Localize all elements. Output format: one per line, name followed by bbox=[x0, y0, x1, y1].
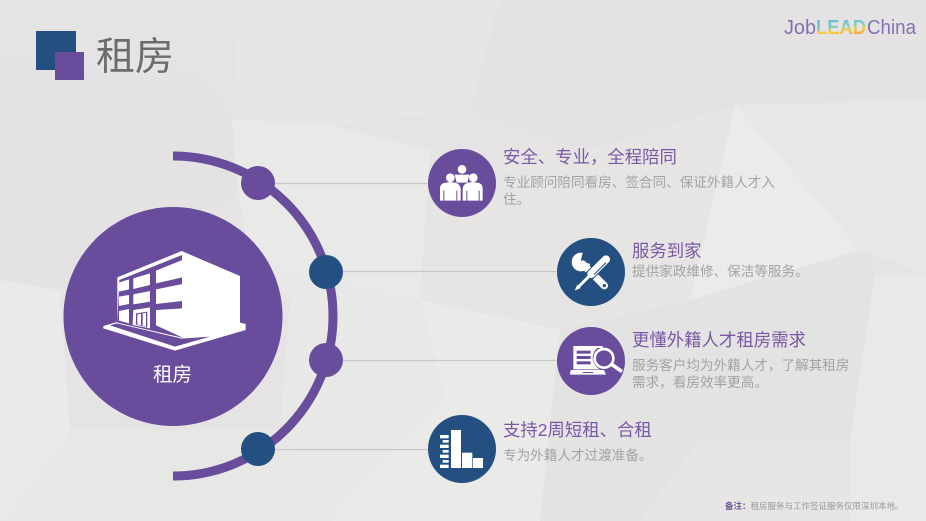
icon badge: people bbox=[428, 149, 496, 217]
arc bbox=[173, 156, 333, 476]
connector lines bbox=[258, 184, 560, 450]
item 4 text: 专为外籍人才过渡准备。 bbox=[503, 448, 653, 463]
item 3 text: 更懂外籍人才租房需求 bbox=[632, 330, 806, 350]
item 1 text: 安全、专业，全程陪同 bbox=[503, 147, 677, 167]
logo: JobLEADChina: LEAD bbox=[816, 17, 866, 39]
footnote: 备注：租房服务与工作签证服务仅限深圳本地。 bbox=[725, 501, 904, 511]
item 2 text: 服务到家 bbox=[632, 241, 702, 261]
item 3 text: 服务客户均为外籍人才，了解其租房需求，看房效率更高。 bbox=[632, 358, 850, 390]
arc node 3 bbox=[309, 343, 343, 377]
item 3 text bbox=[632, 330, 850, 390]
logo: JobLEADChina bbox=[784, 17, 917, 39]
arc node 4 bbox=[241, 432, 275, 466]
main circle label: 租房 bbox=[153, 364, 192, 386]
logo: JobLEADChina: China bbox=[867, 17, 917, 39]
item 4 text: 支持2周短租、合租 bbox=[503, 420, 652, 440]
main circle with building icon bbox=[64, 207, 282, 426]
icon badge: laptop and magnifier bbox=[557, 327, 625, 395]
arc node 1 bbox=[241, 166, 275, 200]
title: 租房 bbox=[96, 36, 174, 79]
item 2 text: 提供家政维修、保洁等服务。 bbox=[632, 264, 809, 279]
icon badge: tools bbox=[557, 238, 625, 306]
logo mark: overlapping squares bbox=[36, 31, 84, 80]
logo: JobLEADChina: Job bbox=[784, 17, 816, 39]
item 1 text bbox=[503, 147, 775, 206]
item 2 text bbox=[632, 241, 809, 279]
arc node 2 bbox=[309, 255, 343, 289]
item 1 text: 专业顾问陪同看房、签合同、保证外籍人才入住。 bbox=[503, 175, 775, 206]
icon badge: bar chart bbox=[428, 415, 496, 483]
icon: building bbox=[103, 251, 246, 351]
item 4 text bbox=[503, 420, 653, 463]
